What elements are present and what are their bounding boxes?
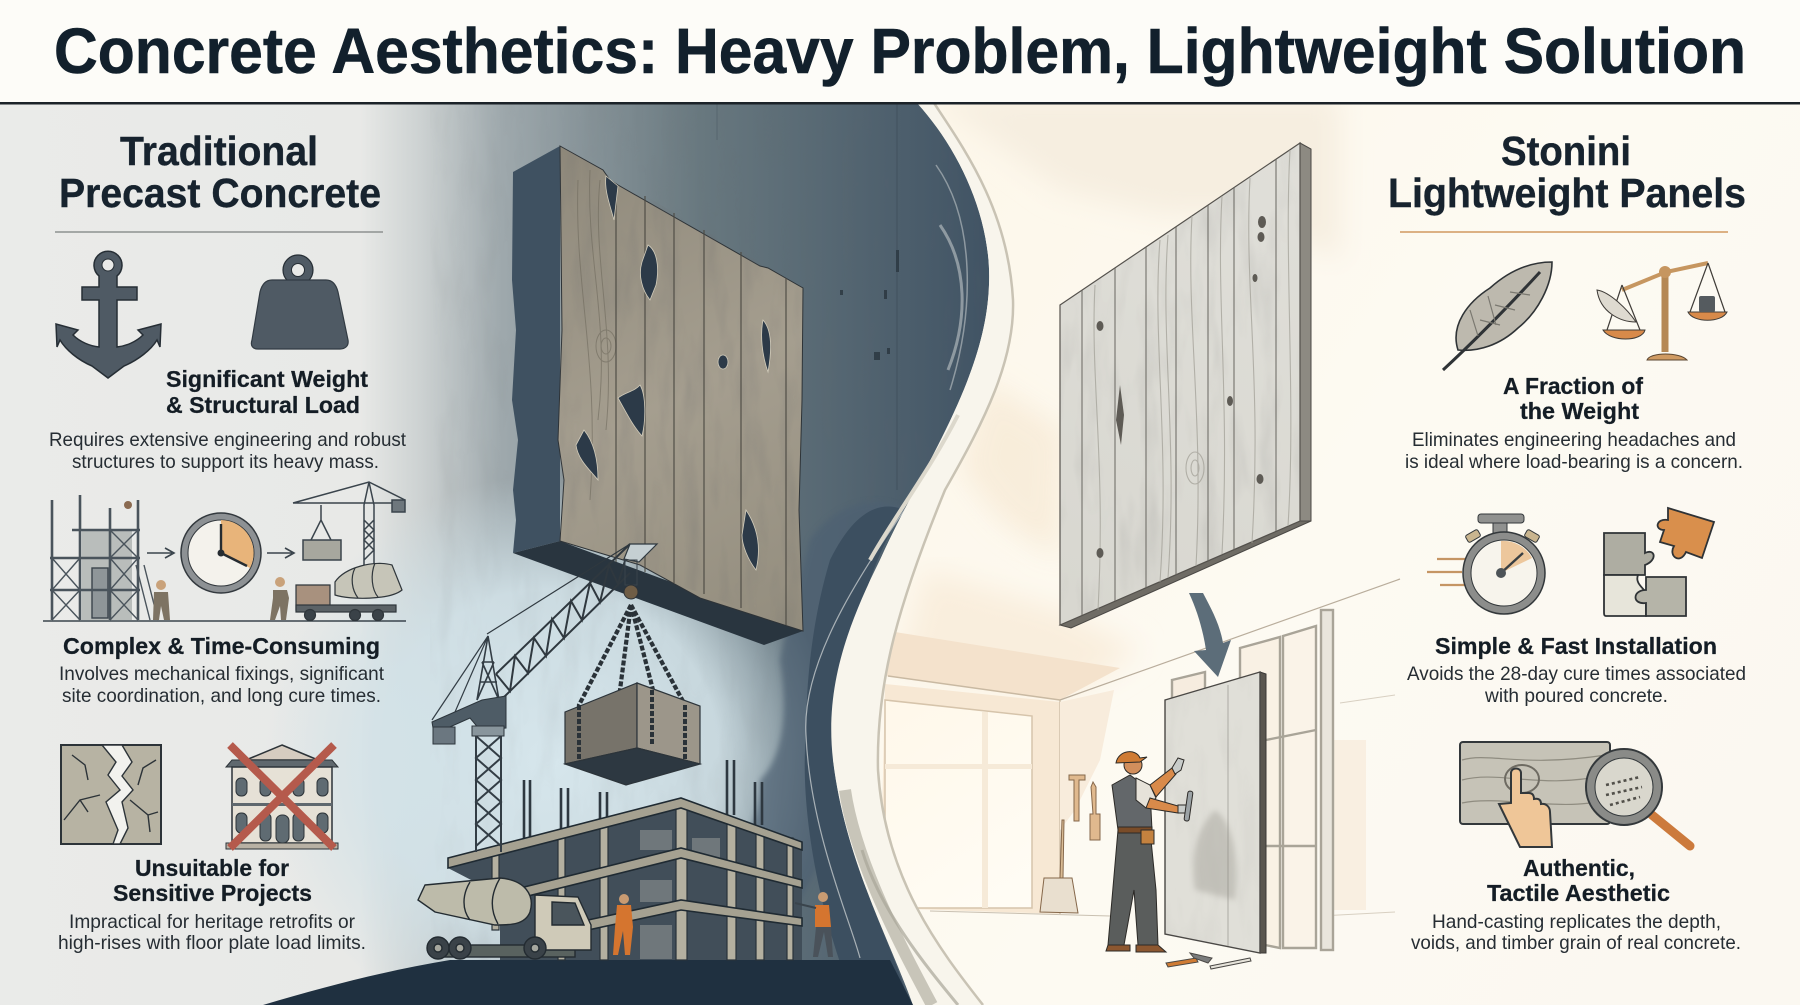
torso (1112, 775, 1152, 830)
heading (1388, 128, 1746, 216)
icon: feather (1443, 262, 1552, 370)
head (1124, 756, 1142, 774)
wood grain (578, 170, 616, 500)
subheading: weight: Significant Weight (166, 366, 368, 392)
concrete tie marks (840, 250, 899, 360)
body: weight: is ideal where load-bearing is a concern. (1405, 451, 1743, 473)
chains front (579, 690, 685, 760)
body: unsuitable: high-rises with floor plate load limits. (58, 932, 366, 954)
panel: stonini lightweight panels (1388, 128, 1746, 954)
body: aesthetic (1411, 911, 1741, 954)
panel seams (1082, 159, 1276, 615)
board seams (616, 185, 786, 625)
panel underside (1060, 521, 1311, 628)
hero: heavy precast slab (512, 146, 803, 645)
heading: Traditional (120, 128, 318, 174)
heading (59, 128, 381, 216)
icon: anchor (56, 251, 161, 378)
panel side (1300, 143, 1311, 521)
swirl streaks (806, 165, 967, 958)
icon: worker (270, 577, 289, 620)
subheading: aesthetic: Authentic, (1523, 855, 1635, 881)
icon: worker (153, 580, 170, 620)
arrow (147, 548, 174, 558)
columns (492, 803, 793, 960)
panel: traditional precast concrete (43, 128, 407, 954)
body: weight: Requires extensive engineering and robust (49, 429, 407, 451)
subheading: unsuitable: Sensitive Projects (113, 880, 312, 906)
body: weight (1405, 429, 1743, 473)
slab side (512, 146, 560, 553)
body: weight: structures to support its heavy mass. (72, 451, 379, 473)
hook (624, 560, 638, 599)
crane cab (432, 696, 506, 744)
background: dark concrete side (0, 103, 989, 1005)
hero: site workers (613, 892, 833, 957)
arrow (267, 548, 294, 558)
panel voids (1096, 216, 1266, 558)
panel wood grain (1094, 150, 1291, 610)
hero: lightweight panel (1060, 143, 1311, 628)
slab face (558, 146, 803, 631)
mounted panel (1165, 672, 1266, 953)
subheading: weight: A Fraction of (1503, 373, 1643, 399)
icon: cracked concrete (61, 745, 161, 844)
voids (576, 176, 771, 570)
body: complex: site coordination, and long cure times. (62, 685, 381, 707)
wall tools (1040, 775, 1100, 913)
hero: crane and hanging block (432, 544, 700, 852)
crane jib (487, 544, 657, 700)
body: unsuitable: Impractical for heritage retrofits or (69, 911, 355, 933)
crane mast (432, 636, 501, 852)
subheading: aesthetic (1487, 855, 1670, 906)
icon: textured panel, hand and magnifier (1460, 742, 1690, 847)
body: weight: Eliminates engineering headaches and (1412, 429, 1736, 451)
subheading: complex: Complex & Time-Consuming (63, 633, 380, 659)
slab underside (513, 541, 803, 645)
chains (578, 605, 685, 760)
hero: concrete frame building (448, 760, 802, 960)
light rays and room backdrop (880, 95, 1400, 950)
subheading: aesthetic: Tactile Aesthetic (1487, 880, 1670, 906)
curved white divider band (831, 103, 1013, 1005)
body: unsuitable (58, 911, 366, 954)
floor tools (1166, 953, 1251, 969)
installer figure (1106, 752, 1193, 952)
room: ceiling band (885, 632, 1120, 700)
gloves and tool (1172, 758, 1190, 813)
panel face (1060, 143, 1300, 625)
subheading: unsuitable (113, 855, 312, 906)
ground (263, 960, 913, 1005)
icon: clock (181, 513, 261, 593)
icon: tower crane (293, 482, 405, 565)
body: weight (49, 429, 407, 473)
body: aesthetic: Hand-casting replicates the depth, (1432, 911, 1721, 933)
arms (1150, 768, 1176, 797)
subheading: weight: & Structural Load (166, 392, 360, 418)
legs (1108, 830, 1158, 945)
subheading: weight: the Weight (1520, 398, 1639, 424)
room: floor line (930, 911, 1110, 916)
heading: Precast Concrete (59, 170, 381, 216)
title: Concrete Aesthetics: Heavy Problem, Lightweight Solution (54, 15, 1746, 87)
icon: puzzle pieces (1604, 508, 1714, 616)
icon: weight (251, 255, 348, 349)
hero: concrete mixer truck (418, 878, 591, 959)
icon: scaffold (50, 495, 158, 620)
icon: stopwatch (1427, 514, 1545, 614)
body: complex: Involves mechanical fixings, significant (59, 663, 385, 685)
magnifier (1586, 749, 1690, 846)
hand (1499, 765, 1552, 847)
body: aesthetic: voids, and timber grain of real concrete. (1411, 932, 1741, 954)
slabs (448, 798, 802, 930)
stacked boards (640, 830, 720, 959)
header band (0, 0, 1800, 104)
body: installation: with poured concrete. (1484, 685, 1668, 707)
subheading: weight (1503, 373, 1643, 424)
down arrow (1189, 593, 1231, 677)
icon: mixer truck (296, 563, 402, 620)
room: left wall and window (880, 684, 1060, 914)
rebar stubs (524, 760, 762, 840)
body: complex (59, 663, 385, 707)
icon row: complex process (43, 482, 406, 621)
icon: balance scale (1597, 263, 1727, 360)
subheading: weight (166, 366, 368, 418)
smoke shadow (720, 502, 905, 900)
heading: Lightweight Panels (1388, 170, 1746, 216)
subheading: unsuitable: Unsuitable for (135, 855, 289, 881)
body: installation (1407, 663, 1746, 707)
body: installation: Avoids the 28-day cure times associated (1407, 663, 1746, 685)
block (565, 683, 700, 785)
boots (1106, 945, 1166, 952)
subheading: installation: Simple & Fast Installation (1435, 633, 1717, 659)
heading: Stonini (1501, 128, 1631, 174)
icon: heritage building crossed out (226, 745, 338, 849)
room: tall window frames (1172, 610, 1333, 950)
tool belt (1118, 827, 1152, 833)
